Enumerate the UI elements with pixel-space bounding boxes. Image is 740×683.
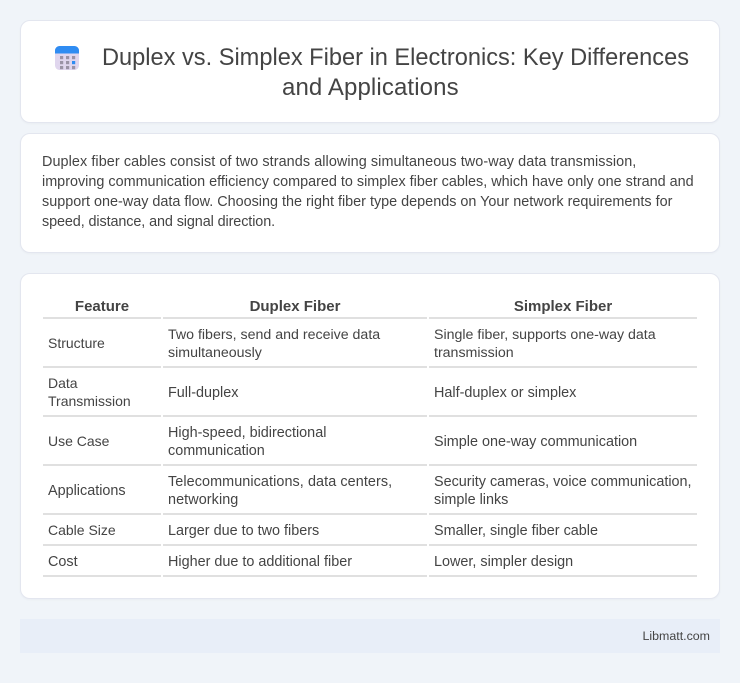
table header: Simplex Fiber: Simplex Fiber: [514, 298, 612, 315]
intro text: [42, 154, 694, 230]
Structure duplex: [168, 327, 380, 361]
Data Transmission simplex: Half-duplex or simplex: [434, 385, 576, 401]
panel: comparison table: [20, 273, 720, 599]
row: Use Case: Use Case: [48, 433, 109, 449]
Cost simplex: Lower, simpler design: [434, 554, 573, 570]
row: Cable Size: Cable Size: [48, 522, 116, 538]
intro text: improving communication efficiency compared to simplex fiber cables, which have only one strand and: [42, 174, 694, 190]
row: Cost: Cost: [48, 554, 78, 570]
title: and Applications: [282, 74, 459, 101]
Applications simplex: Security cameras, voice communication,: [434, 474, 692, 490]
Structure simplex: [434, 327, 656, 361]
footer: Libmatt.com: [643, 629, 710, 643]
Applications duplex: [168, 474, 392, 508]
table header: Feature: Feature: [75, 298, 129, 315]
Applications simplex: simple links: [434, 492, 508, 508]
Structure simplex: transmission: [434, 345, 514, 361]
row: Data Transmission: Transmission: [48, 393, 131, 409]
Use Case duplex: [168, 425, 326, 459]
icon: calendar: [55, 46, 79, 70]
Structure simplex: Single fiber, supports one-way data: [434, 327, 656, 343]
Use Case duplex: High-speed, bidirectional: [168, 425, 326, 441]
intro text: support one-way data flow. Choosing the right fiber type depends on Your network requirements for: [42, 194, 672, 210]
Applications duplex: Telecommunications, data centers,: [168, 474, 392, 490]
Use Case simplex: Simple one-way communication: [434, 434, 637, 450]
title: [102, 45, 689, 101]
row: Applications: Applications: [48, 483, 126, 499]
Structure duplex: Two fibers, send and receive data: [168, 327, 380, 343]
Structure duplex: simultaneously: [168, 345, 262, 361]
Cost duplex: Higher due to additional fiber: [168, 554, 352, 570]
Cable Size simplex: Smaller, single fiber cable: [434, 523, 598, 539]
table header: Duplex Fiber: Duplex Fiber: [250, 298, 340, 315]
Applications duplex: networking: [168, 492, 238, 508]
Cable Size duplex: Larger due to two fibers: [168, 523, 319, 539]
row: Structure: Structure: [48, 335, 105, 351]
intro text: speed, distance, and signal direction.: [42, 214, 275, 230]
intro text: Duplex fiber cables consist of two strands allowing simultaneous two-way data transmission,: [42, 154, 636, 170]
title: Duplex vs. Simplex Fiber in Electronics: Key Differences: [102, 45, 689, 71]
panel: intro: [20, 133, 720, 253]
footer: [20, 619, 720, 653]
row: Data Transmission: [48, 375, 131, 409]
row: Data Transmission: Data: [48, 375, 78, 391]
Data Transmission duplex: Full-duplex: [168, 385, 238, 401]
header card: [20, 20, 720, 123]
Applications simplex: [434, 474, 692, 508]
Use Case duplex: communication: [168, 443, 265, 459]
